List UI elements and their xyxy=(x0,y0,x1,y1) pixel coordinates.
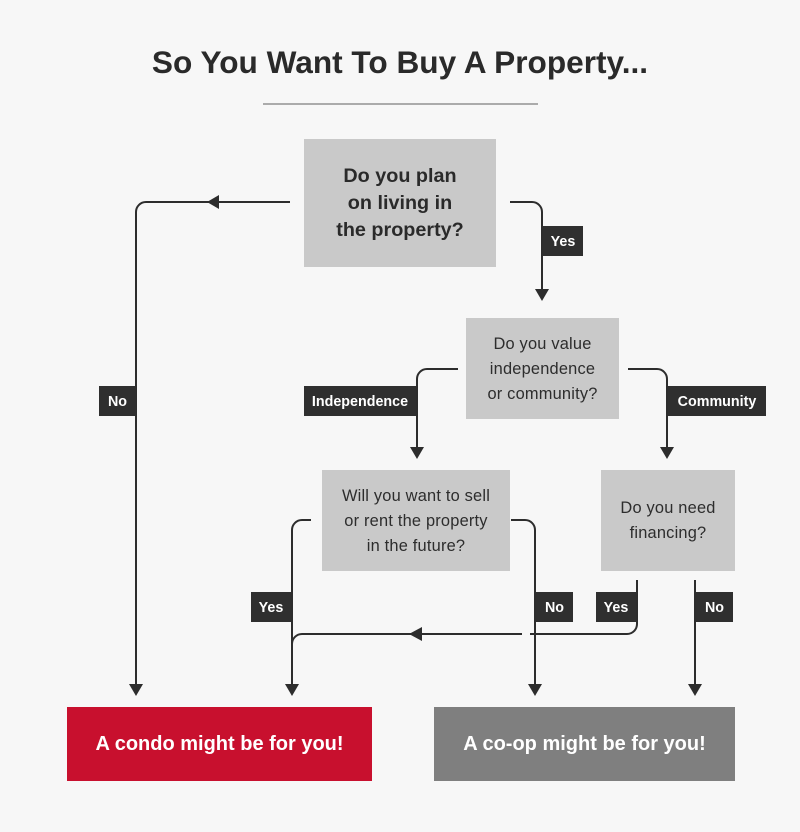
question box: independence or community: Do you value xyxy=(493,335,592,353)
question box: living in the property xyxy=(304,139,496,267)
label: Independence: Independence xyxy=(312,394,408,410)
label: No (financing): No xyxy=(705,600,724,616)
question box: independence or community: or community? xyxy=(487,385,598,403)
outcome: condo: A condo might be for you! xyxy=(95,733,344,755)
question box: sell or rent: or rent the property xyxy=(344,512,488,530)
question box: living in the property: on living in xyxy=(348,192,452,214)
question box: sell or rent xyxy=(322,470,510,571)
label: No (sell): No xyxy=(545,600,564,616)
label: Community: Community xyxy=(678,394,756,410)
label: No: No xyxy=(108,394,127,410)
outcome: co-op: A co-op might be for you! xyxy=(463,733,706,755)
label: Community xyxy=(668,386,766,416)
question box: financing: financing? xyxy=(630,524,706,542)
label: No (sell) xyxy=(536,592,573,622)
outcome: condo xyxy=(67,707,372,781)
label: Yes (sell) xyxy=(251,592,291,622)
question box: financing: Do you need xyxy=(620,499,716,517)
title: So You Want To Buy A Property... xyxy=(152,44,648,80)
label: Independence xyxy=(304,386,416,416)
title divider xyxy=(263,103,538,105)
question box: sell or rent: in the future? xyxy=(367,537,465,555)
question box: living in the property: the property? xyxy=(336,219,464,241)
question box: independence or community: independence xyxy=(490,360,595,378)
label: Yes (financing): Yes xyxy=(604,600,628,616)
question box: independence or community xyxy=(466,318,619,419)
question box: sell or rent: Will you want to sell xyxy=(342,487,490,505)
label: No (financing) xyxy=(696,592,733,622)
question box: living in the property: Do you plan xyxy=(343,165,457,187)
label: Yes: Yes xyxy=(551,234,575,250)
label: Yes (sell): Yes xyxy=(259,600,283,616)
label: No xyxy=(99,386,136,416)
outcome: co-op xyxy=(434,707,735,781)
label: Yes xyxy=(543,226,583,256)
label: Yes (financing) xyxy=(596,592,636,622)
question box: financing xyxy=(601,470,735,571)
